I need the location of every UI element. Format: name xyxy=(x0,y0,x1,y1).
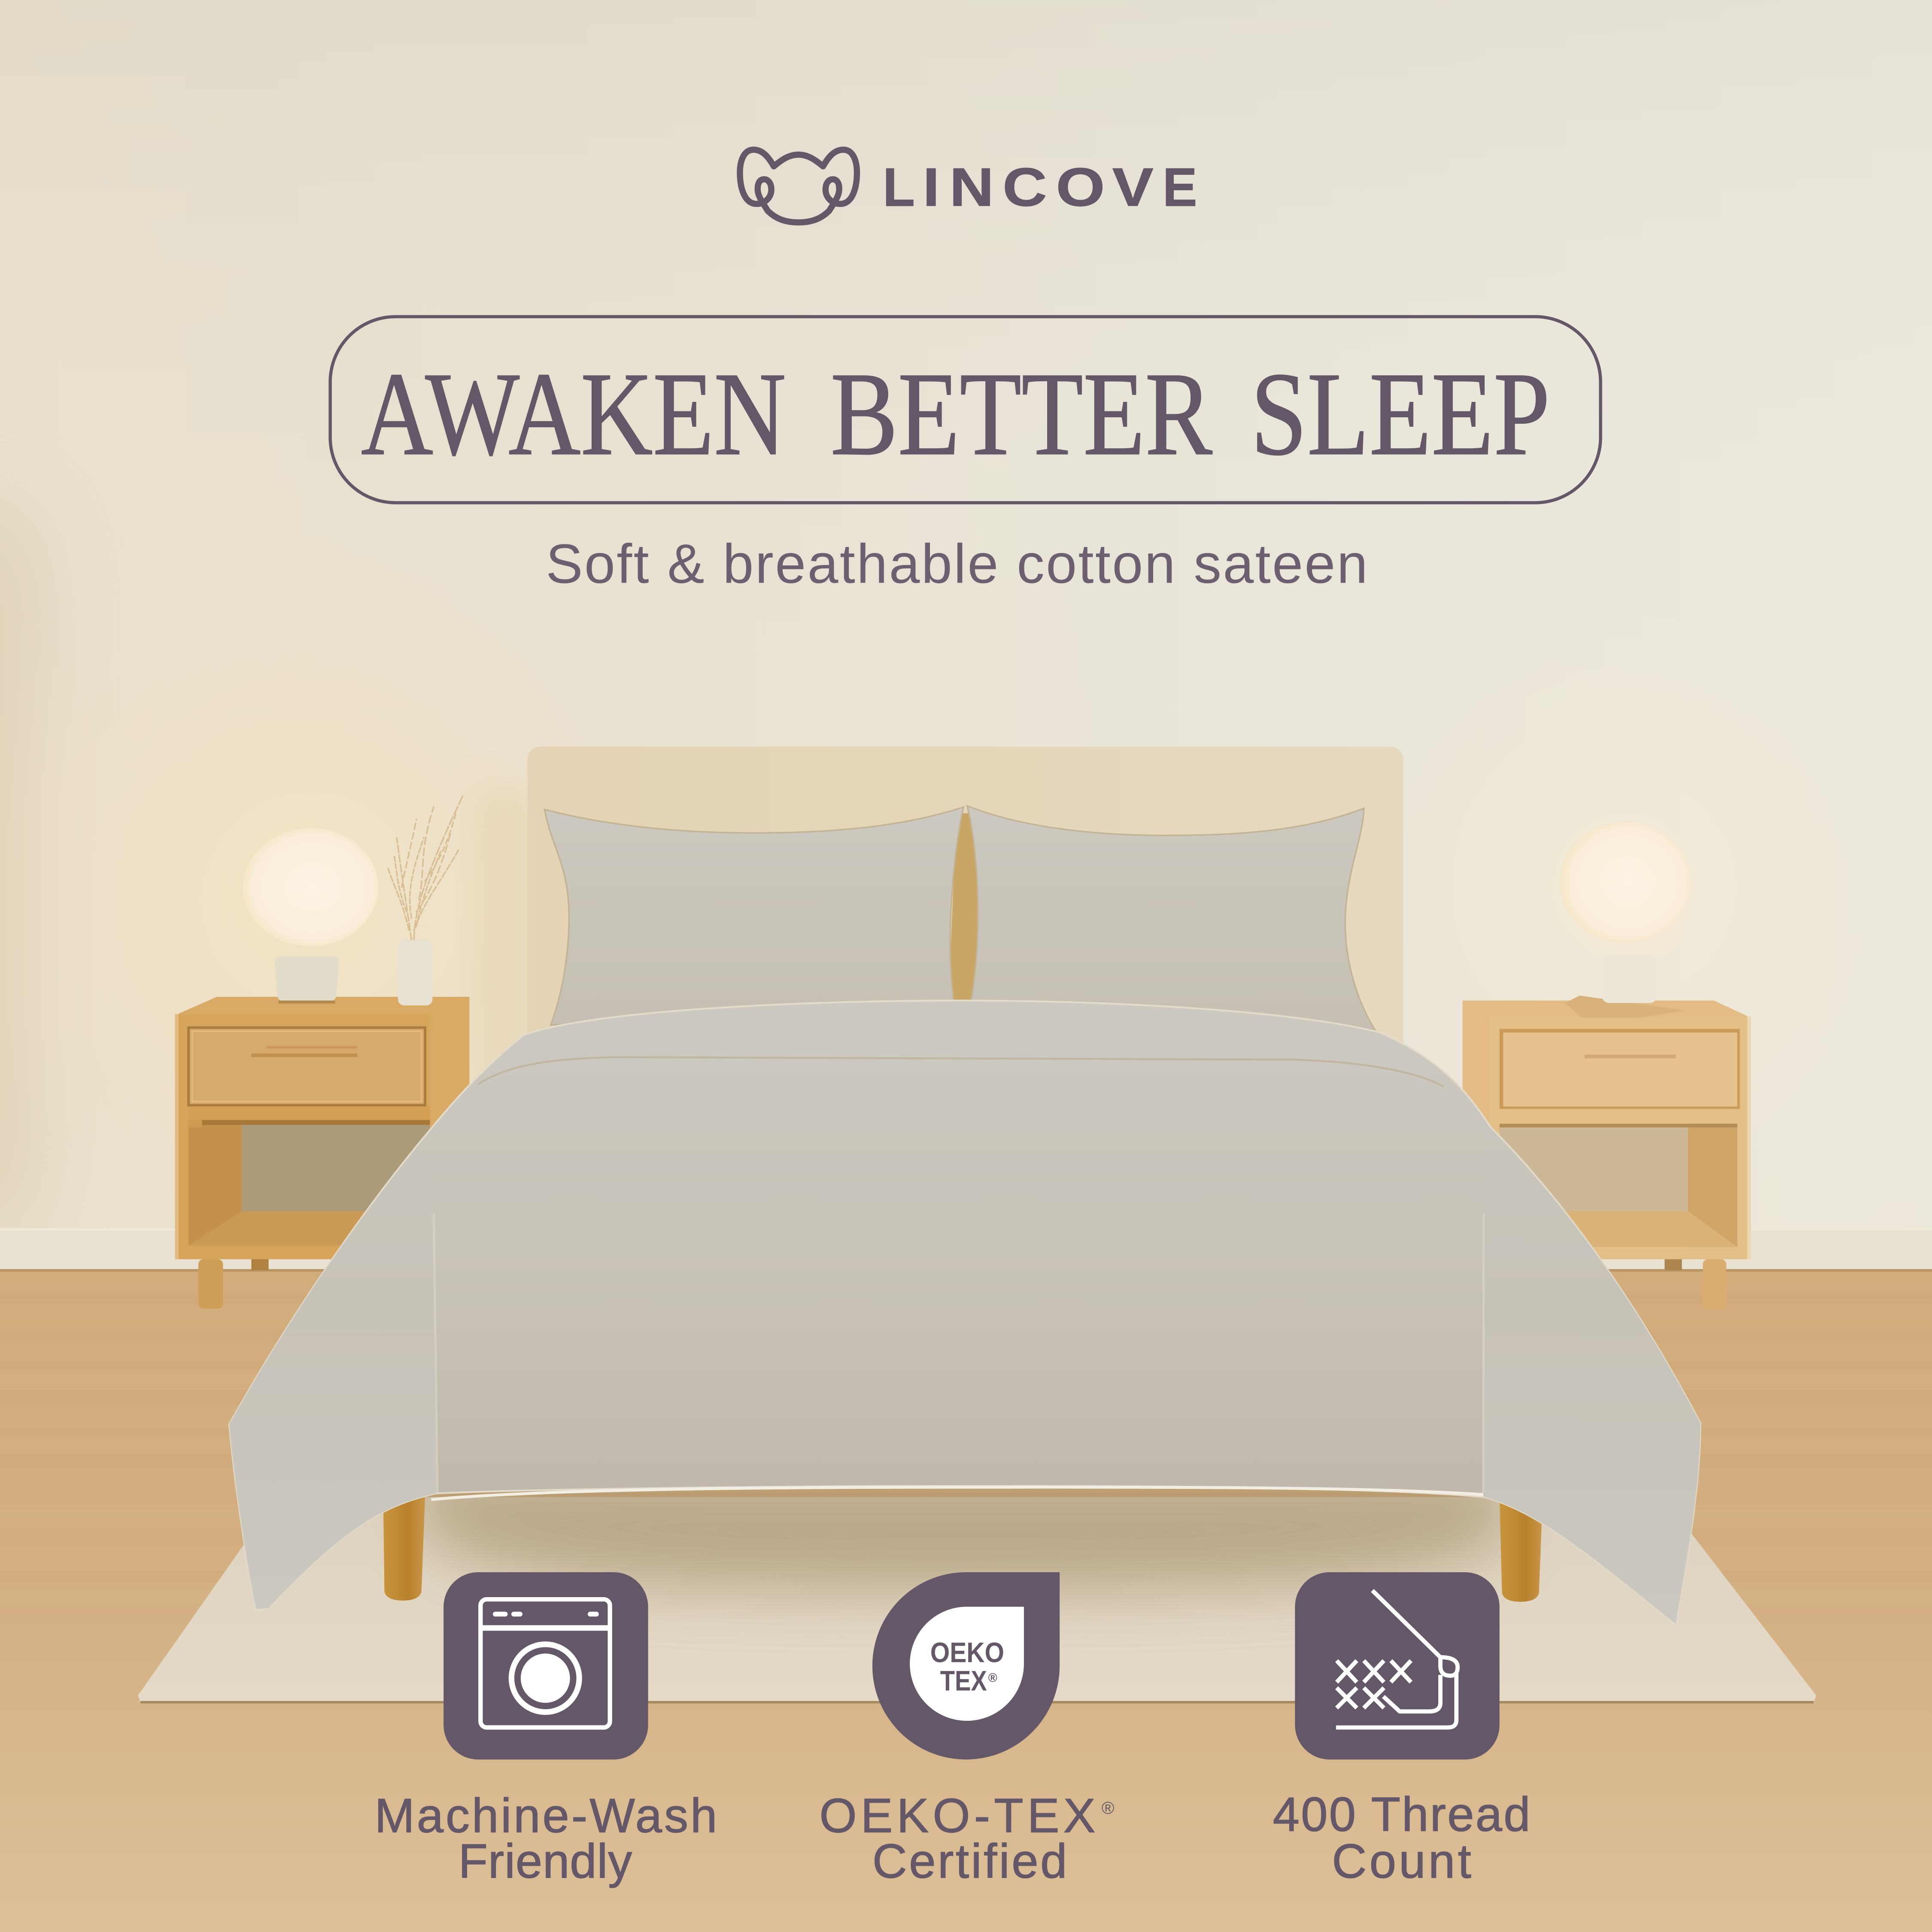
icon: thread count needle xyxy=(1295,1572,1500,1759)
duvet hem xyxy=(431,1487,1483,1500)
title xyxy=(361,348,1550,480)
gap between pillows xyxy=(949,813,983,1000)
sheet fold xyxy=(478,1057,1444,1087)
duvet xyxy=(229,1000,1700,1624)
icon: OEKO-TEX badge xyxy=(872,1572,1060,1759)
label: 400 thread count: 400 Thread xyxy=(1273,1788,1530,1841)
label: machine-wash friendly: Machine-Wash xyxy=(374,1789,717,1843)
title: BETTER xyxy=(830,348,1213,480)
label: 400 thread count: Count xyxy=(1332,1835,1471,1888)
logo wordmark: O xyxy=(1056,157,1105,217)
logo wordmark: V xyxy=(1112,157,1154,217)
label: OEKO-TEX certified: ® xyxy=(1102,1798,1114,1817)
logo wordmark: C xyxy=(1002,157,1047,217)
logo wordmark: N xyxy=(950,157,994,217)
bed leg left xyxy=(383,1497,425,1601)
nightstand opening xyxy=(188,1120,430,1245)
pillow right xyxy=(967,806,1375,1030)
shadow under bed xyxy=(407,1473,1510,1589)
drawer xyxy=(187,1027,426,1106)
right lamp and books xyxy=(1560,822,1691,1018)
icon: OEKO-TEX badge: OEKO xyxy=(930,1636,1004,1668)
baseboard xyxy=(0,1228,1932,1269)
duvet silhouette xyxy=(229,1000,1700,1624)
vase with dried branches xyxy=(388,795,463,1005)
label: 400 thread count xyxy=(1273,1788,1530,1888)
logo wordmark: E xyxy=(1163,157,1197,217)
label: machine-wash friendly: Friendly xyxy=(459,1835,632,1888)
left nightstand xyxy=(175,997,469,1309)
duvet side right xyxy=(1485,1121,1700,1624)
rug xyxy=(138,1497,1816,1704)
floor xyxy=(0,1269,1932,1932)
icon: OEKO-TEX badge: TEX xyxy=(940,1665,987,1696)
title frame xyxy=(330,317,1601,503)
right nightstand xyxy=(1463,1000,1751,1310)
subtitle: Soft & breathable cotton sateen xyxy=(546,533,1368,595)
label: OEKO-TEX certified xyxy=(819,1789,1114,1888)
drawer xyxy=(1500,1029,1740,1109)
label: machine-wash friendly xyxy=(374,1789,717,1888)
pillow left xyxy=(544,807,963,1025)
nightstand opening xyxy=(1500,1124,1738,1247)
logo wordmark: L xyxy=(883,157,915,217)
logo wordmark: I xyxy=(923,157,939,217)
duvet side left xyxy=(229,1130,436,1609)
headboard xyxy=(527,747,1403,1060)
title: SLEEP xyxy=(1251,348,1550,480)
title: AWAKEN xyxy=(361,348,786,480)
bed leg right xyxy=(1500,1497,1543,1602)
wall background xyxy=(0,0,1932,1275)
label: OEKO-TEX certified: Certified xyxy=(872,1835,1067,1888)
icon: OEKO-TEX badge: ® xyxy=(988,1671,997,1685)
label: OEKO-TEX certified: OEKO-TEX xyxy=(819,1789,1095,1843)
logo xyxy=(740,150,1197,222)
logo mark xyxy=(740,150,857,222)
icon: washing machine xyxy=(444,1572,648,1759)
left lamp xyxy=(243,828,378,1004)
